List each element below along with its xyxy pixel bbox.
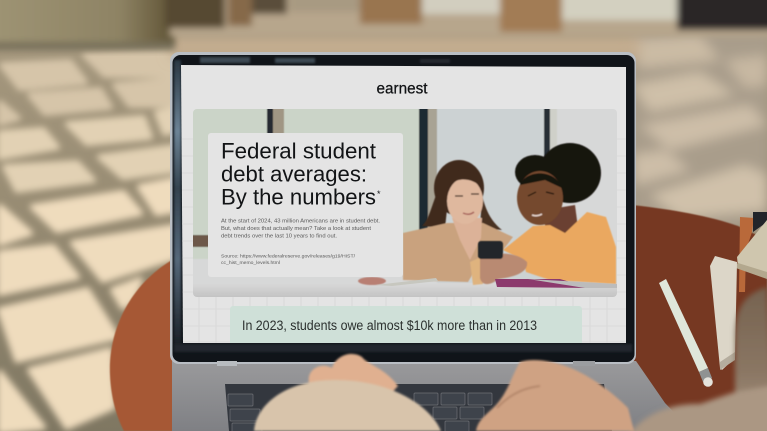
heading: By the numbers bbox=[221, 184, 376, 210]
laptop screen bbox=[181, 65, 626, 346]
title card bbox=[208, 133, 403, 277]
laptop lid and bezel bbox=[170, 52, 636, 366]
binder and papers on table bbox=[376, 278, 617, 288]
heading: debt averages: bbox=[221, 162, 367, 186]
logo: earnest: earnest bbox=[376, 80, 428, 98]
intro paragraph: debt trends over the last 10 years to find out. bbox=[221, 234, 337, 240]
left hand bbox=[309, 354, 398, 400]
typing hands and sweater sleeves bbox=[254, 287, 767, 431]
left knit sleeve bbox=[254, 380, 441, 431]
source note: cc_hist_memo_levels.html bbox=[221, 260, 280, 266]
laptop keyboard deck bbox=[172, 361, 692, 431]
phone and hands bbox=[358, 241, 527, 285]
intro paragraph: But, what does that actually mean? Take a look at student bbox=[221, 226, 372, 232]
round terracotta table bbox=[110, 205, 767, 431]
right hand bbox=[476, 360, 634, 431]
right sleeve and arm, out of focus bbox=[625, 287, 767, 431]
desk items: orange book and notebooks bbox=[710, 212, 767, 370]
intro paragraph: At the start of 2024, 43 million Americans are in student debt. bbox=[221, 218, 380, 224]
student on left bbox=[403, 160, 513, 282]
student on right bbox=[503, 143, 616, 284]
pencil bbox=[659, 279, 713, 387]
source note: Source: https://www.federalreserve.gov/releases/g19/HIST/ bbox=[221, 254, 356, 260]
grid background bbox=[182, 139, 626, 343]
window and wall backdrop bbox=[190, 106, 620, 300]
blurred wall and furniture at top bbox=[0, 0, 767, 50]
heading: * bbox=[377, 189, 381, 199]
hero photo bbox=[190, 106, 620, 300]
mint headline banner: In 2023, students owe almost $10k more than in 2013 bbox=[242, 318, 537, 333]
mint headline banner bbox=[230, 306, 582, 346]
heading: Federal student bbox=[221, 138, 377, 164]
